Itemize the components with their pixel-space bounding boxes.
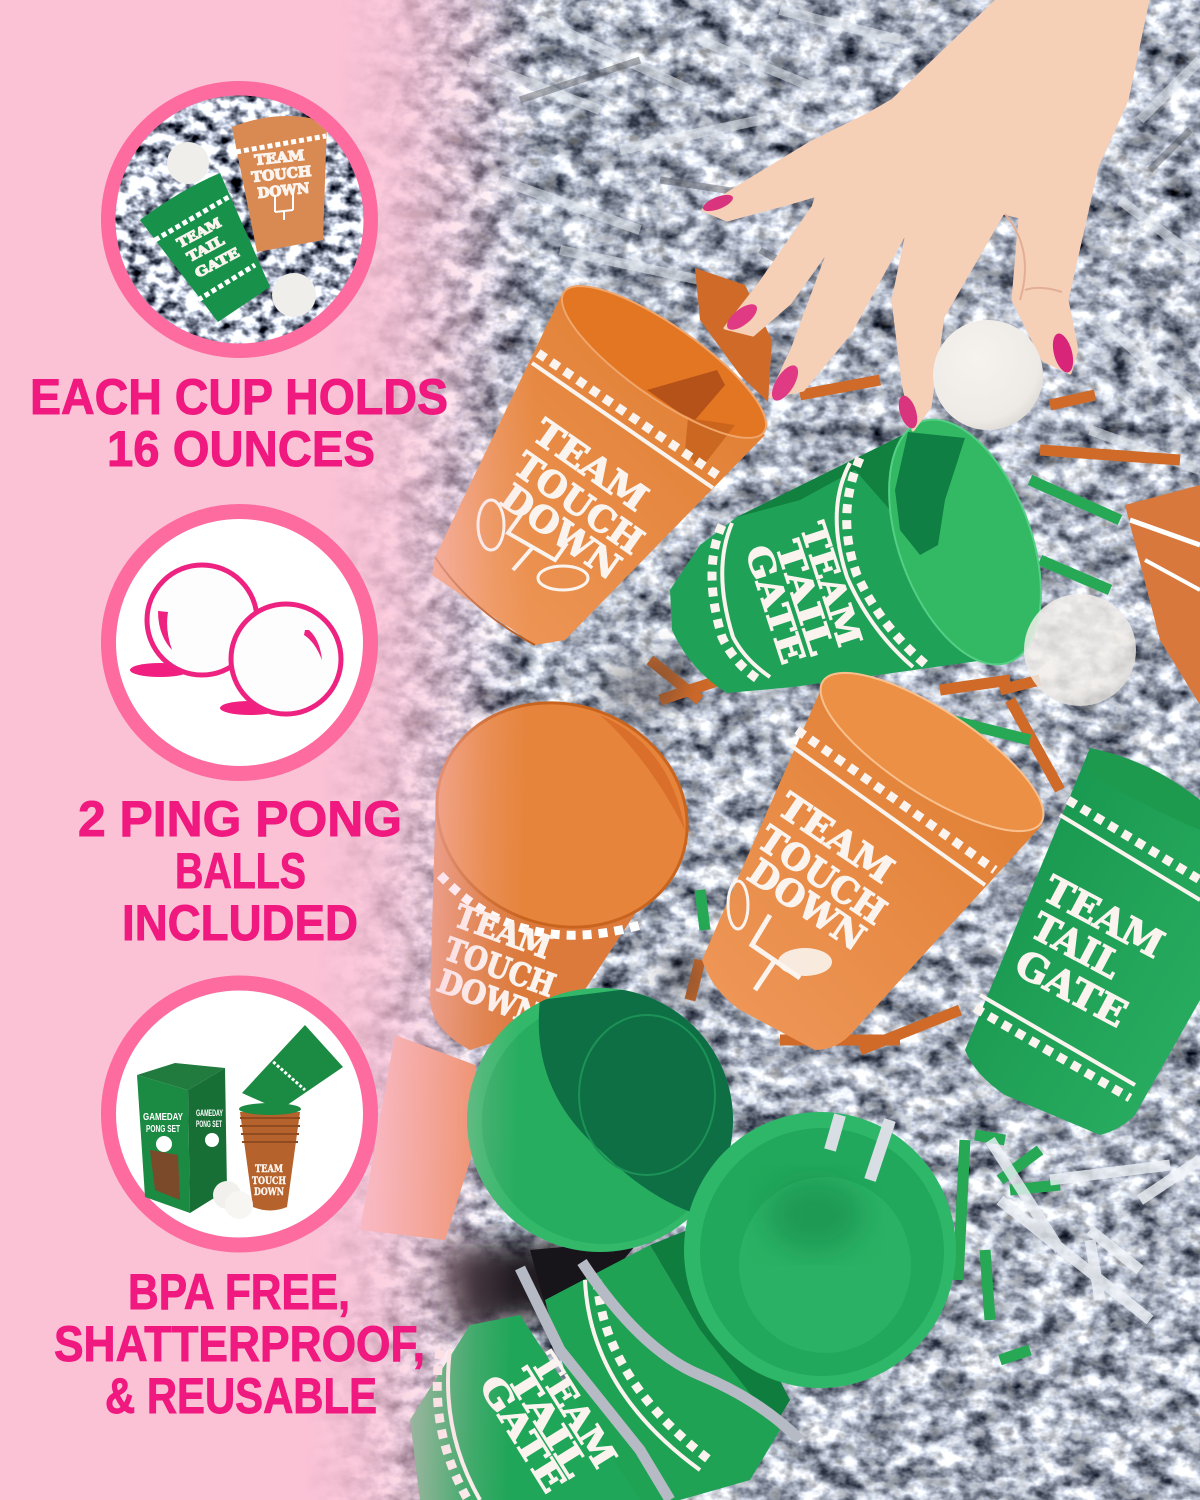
cup: green Team Tailgate top: GATE: [736, 540, 812, 669]
badge: product set photo: [108, 983, 370, 1245]
cup: green Team Tailgate top: TEAM: [791, 517, 869, 652]
caption: BPA free, shatterproof, reusable: SHATTERPROOF,: [54, 1316, 425, 1372]
cup: green bottom with text: TAIL: [498, 1362, 596, 1485]
cup: green bottom with text: GATE: [470, 1369, 573, 1500]
mini green cup: TAIL: [185, 234, 227, 266]
mini cup stack: [239, 1025, 343, 1210]
pink fade overlay: [0, 0, 700, 1500]
mini box: [137, 1063, 227, 1213]
mini green cup: [140, 173, 270, 322]
cup: orange open, middle left: TEAM: [449, 897, 556, 967]
cup: orange open, middle left: TOUCH: [439, 930, 560, 1005]
dark foil patches: [600, 650, 705, 1005]
ping pong ball in tinsel: [1024, 594, 1136, 706]
hand reaching for ball: [701, 0, 1148, 431]
mini box: GAMEDAY: [143, 1112, 183, 1123]
cup: green right Team Tailgate: TAIL: [1024, 903, 1129, 988]
cup: orange open, middle left: [405, 668, 719, 1050]
caption: 2 ping pong balls included: 2 PING PONG: [78, 791, 402, 847]
cup: orange Team Touch Down top: DOWN: [493, 476, 628, 588]
cup: green bottom with text: [410, 1315, 640, 1500]
cup: orange center Team Touch Down: DOWN: [740, 851, 873, 959]
cup: orange center Team Touch Down: TOUCH: [750, 818, 894, 934]
mini cup stack: TEAM: [255, 1164, 283, 1175]
cup: green Team Tailgate top: TAIL: [766, 535, 841, 660]
cup: orange center Team Touch Down: TEAM: [770, 785, 901, 892]
mini box: GAMEDAY: [196, 1108, 223, 1118]
badge: cups photo: [108, 88, 370, 350]
cup: orange center Team Touch Down: [702, 646, 1064, 1050]
caption: BPA free, shatterproof, reusable: & REUSABLE: [105, 1368, 377, 1424]
cup: orange open, middle left: DOWN: [432, 962, 547, 1034]
cup: green right Team Tailgate: TEAM: [1036, 866, 1172, 967]
mini cup stack: DOWN: [254, 1187, 284, 1198]
mini box: PONG SET: [146, 1124, 180, 1135]
orange tinsel cluster: [695, 268, 772, 402]
mini green cup: TEAM: [175, 216, 224, 252]
cup: orange Team Touch Down top: TEAM: [525, 411, 655, 520]
mini orange cup: [232, 116, 327, 252]
caption: 2 ping pong balls included: [78, 791, 402, 951]
mini orange cup: TOUCH: [251, 164, 312, 186]
tinsel strands: [470, 10, 1200, 1360]
cup: green open, bottom center: [684, 1112, 956, 1388]
cup: green bottom with text: TEAM: [522, 1346, 624, 1475]
cup: green right Team Tailgate: GATE: [1008, 940, 1135, 1036]
cup: orange behind, far left: [360, 1035, 480, 1240]
cup: green back, bottom: [545, 1225, 790, 1500]
mini orange cup: TEAM: [254, 148, 305, 169]
dark shadow under bottom cups: [440, 1240, 640, 1330]
cup: orange Team Touch Down top: [432, 263, 785, 645]
cup: green right Team Tailgate: [965, 748, 1200, 1135]
caption: 2 ping pong balls included: BALLS: [175, 843, 306, 899]
mini green cup: GATE: [193, 246, 242, 282]
caption: each cup holds 16 ounces: 16 OUNCES: [107, 421, 375, 477]
cup: green Team Tailgate top: [670, 399, 1071, 693]
cup: orange far right: [1125, 485, 1200, 705]
caption: each cup holds 16 ounces: [30, 369, 448, 477]
mini orange cup: DOWN: [257, 181, 310, 202]
cup: green open, lower left: [467, 988, 733, 1252]
caption: BPA free, shatterproof, reusable: [54, 1264, 425, 1424]
nails: [701, 191, 735, 215]
badge: ping pong balls icon: [108, 512, 370, 774]
caption: each cup holds 16 ounces: EACH CUP HOLDS: [30, 369, 448, 425]
silver ribbons across bottom cups: [520, 1262, 800, 1500]
mini box: PONG SET: [196, 1119, 222, 1129]
ping pong ball held: [933, 320, 1043, 430]
mini cup stack: TOUCH: [252, 1176, 286, 1187]
caption: BPA free, shatterproof, reusable: BPA FREE,: [128, 1264, 350, 1320]
caption: 2 ping pong balls included: INCLUDED: [122, 895, 358, 951]
cup: orange Team Touch Down top: TOUCH: [506, 444, 651, 563]
